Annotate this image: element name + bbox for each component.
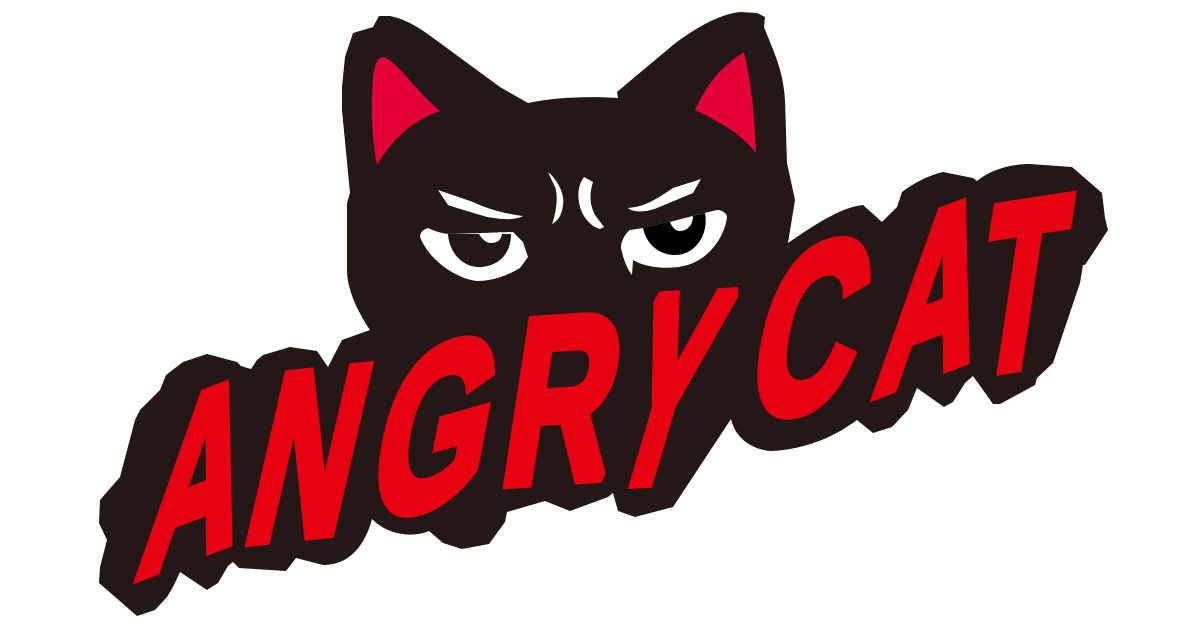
letter C: C xyxy=(731,183,892,473)
icon: right ear xyxy=(695,52,756,153)
letter R: R xyxy=(489,265,638,535)
letter A: A xyxy=(862,138,1009,449)
icon: left ear xyxy=(372,57,440,165)
left eyebrow xyxy=(438,190,523,219)
frown crease left xyxy=(548,172,563,224)
letter G: G xyxy=(354,279,520,574)
frown crease right xyxy=(578,177,604,229)
cat ears xyxy=(372,52,756,165)
letter A: A xyxy=(125,320,272,628)
right eye xyxy=(621,210,727,275)
letter T: T xyxy=(962,145,1082,426)
letter Y: Y xyxy=(583,236,755,542)
letter N: N xyxy=(228,313,391,593)
wordmark: ANGRYCAT xyxy=(125,138,1082,628)
cat face xyxy=(420,172,727,281)
left eye xyxy=(420,228,528,281)
right eyebrow xyxy=(628,179,701,211)
